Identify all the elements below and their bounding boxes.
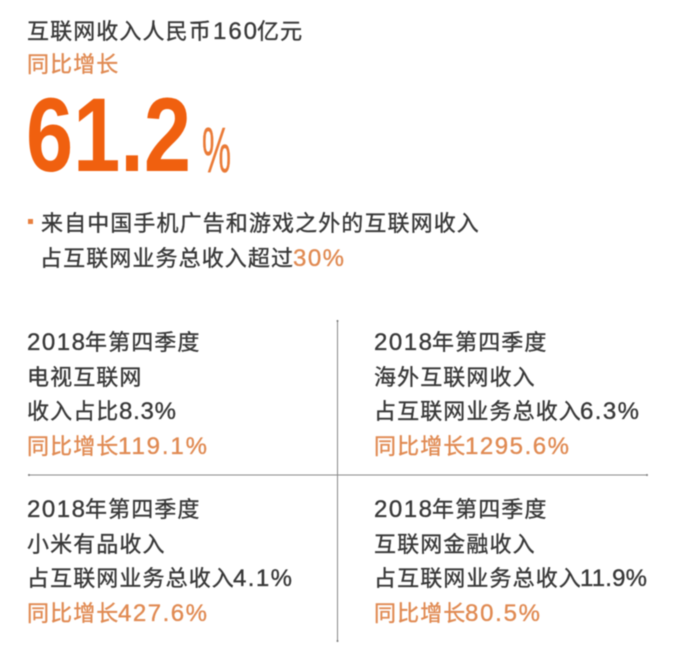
horizontal axis: [28, 474, 648, 476]
growth: [374, 600, 540, 627]
share: 8.3%: [119, 398, 176, 425]
category: 小米有品收入: [27, 532, 166, 557]
big number: 61.2%: %: [202, 114, 231, 186]
period: 年第四季度: [432, 497, 548, 522]
growth: 80.5%: [465, 600, 540, 627]
big number: 61.2%: 61.2: [26, 77, 191, 194]
icon: bullet square: [28, 219, 33, 224]
period: [374, 496, 548, 523]
panel: Youpin: [27, 496, 292, 627]
share: 收入占比: [27, 399, 119, 424]
growth: 同比增长: [27, 601, 119, 626]
period: [27, 329, 201, 356]
period: 年第四季度: [432, 330, 548, 355]
share: 4.1%: [233, 565, 292, 592]
growth: 同比增长: [27, 434, 119, 459]
heading: internet revenue: 亿元: [257, 19, 303, 44]
bullet note: [28, 211, 480, 272]
period: 年第四季度: [85, 497, 201, 522]
period: 2018: [27, 329, 85, 356]
heading: internet revenue: 160: [213, 18, 257, 45]
growth: 同比增长: [374, 434, 466, 459]
period: [374, 329, 548, 356]
period: 年第四季度: [85, 330, 201, 355]
category: 电视互联网: [27, 365, 143, 390]
panel: overseas internet: [374, 329, 639, 460]
category: 互联网金融收入: [374, 532, 536, 557]
panel: TV internet: [27, 329, 207, 460]
note line two: 30%: [293, 245, 344, 272]
share: 占互联网业务总收入: [27, 566, 235, 591]
panel: internet finance: [374, 496, 647, 627]
growth: [27, 433, 207, 460]
category: 海外互联网收入: [374, 365, 536, 390]
period: 2018: [27, 496, 85, 523]
note line one: 来自中国手机广告和游戏之外的互联网收入: [41, 211, 480, 236]
heading: internet revenue: 互联网收入人民币: [27, 19, 212, 44]
growth: 1295.6%: [465, 433, 569, 460]
period: [27, 496, 201, 523]
share: 占互联网业务总收入: [374, 399, 582, 424]
note line two: 占互联网业务总收入超过: [40, 246, 294, 271]
period: 2018: [374, 329, 432, 356]
period: 2018: [374, 496, 432, 523]
vertical axis: [336, 320, 338, 642]
share: 占互联网业务总收入: [374, 566, 582, 591]
growth: [374, 433, 569, 460]
growth: 427.6%: [118, 600, 207, 627]
heading: internet revenue: [27, 18, 303, 45]
growth: 119.1%: [118, 433, 207, 460]
growth: [27, 600, 207, 627]
label: year-on-year growth: 同比增长: [27, 52, 119, 77]
share: [27, 398, 176, 425]
share: 6.3%: [580, 398, 639, 425]
share: 11.9%: [580, 565, 647, 592]
growth: 同比增长: [374, 601, 466, 626]
